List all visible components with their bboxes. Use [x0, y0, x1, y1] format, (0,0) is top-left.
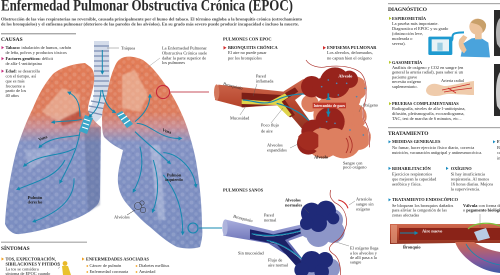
panel: treatment: la supervivencia.: [451, 186, 480, 191]
left lung: [102, 57, 202, 248]
panel: diagnosis: paciente grave: [392, 74, 417, 79]
COPD labels: Alveolo: [314, 154, 328, 160]
panel: lungs with COPD: Los alveolos, deformados,: [327, 50, 373, 56]
panel: diagnosis: Radiografía, niveles de alfa-1-antitripsina,: [392, 106, 465, 112]
panel: treatment: 16 horas diarias. Mejora: [451, 181, 493, 186]
COPD labels: Pared: [256, 74, 267, 78]
icon: coughing person: [58, 261, 71, 275]
COPD labels: Oxígeno: [363, 102, 378, 108]
COPD labels: Poco flujo: [261, 122, 279, 128]
associated diseases: [82, 256, 170, 274]
label: alveolus: Alveolo: [338, 73, 352, 78]
panel: treatment: aeróbica y física.: [392, 181, 422, 186]
panel: causes: [1, 33, 76, 98]
callout: upper lung damage: los pulmones: [162, 60, 185, 65]
healthy labels: Bronquiolo: [233, 214, 253, 223]
intro text: de los bronquiolos) y el enfisema pulmonar (deterioro de las paredes de los alvéolos). En su grado más severo puede producir incapacidad e incluso la muerte.: [1, 22, 299, 27]
panel: healthy lungs: PULMONES SANOS: [223, 188, 264, 192]
panel: lungs with COPD: no captan bien el oxígeno: [327, 55, 372, 60]
panel: treatment: respiratoria. Al menos: [451, 176, 489, 181]
panel: diagnosis: suplementario.: [392, 84, 418, 89]
associated diseases: Cáncer de pulmón: [90, 263, 122, 268]
lung labels: Vena: [162, 127, 173, 135]
COPD labels: de aire: [261, 128, 273, 134]
cause text: con el tiempo, así: [6, 74, 37, 80]
callout: upper lung damage: La Enfermedad Pulmonar: [162, 46, 207, 50]
healthy labels: oxígeno: [356, 206, 370, 212]
panel: treatment: que mejoran la capacidad: [392, 176, 437, 181]
lung tissue texture: [5, 57, 202, 248]
panel: diagnosis: DIAGNÓSTICO: [388, 5, 427, 13]
panel: diagnosis: moderada o: [392, 36, 412, 41]
panel: diagnosis: TAC, test de marcha de 6 minutos, etc...: [392, 116, 462, 122]
panel: lungs with COPD: [214, 36, 378, 170]
panel: lungs with COPD: ENFISEMA PULMONAR: [327, 45, 377, 50]
panel: diagnosis: necesita oxígeno: [392, 79, 421, 84]
panel: treatment: MEDIDAS GENERALES: [392, 139, 441, 144]
panel: lungs with COPD: por los bronquiolos: [228, 55, 262, 60]
lung labels: Pulmón: [28, 195, 43, 200]
cause text: de alfa-1-antitripsina: [6, 61, 42, 66]
healthy labels: Alveolos: [285, 198, 301, 202]
panel: diagnosis: GASOMETRÍA: [392, 60, 423, 65]
panel: treatment: REHABILITACIÓN: [392, 166, 432, 171]
lung labels: izquierdo: [165, 177, 183, 182]
panel: symptoms: SÍNTOMAS: [1, 244, 30, 252]
alveoli detail: [127, 201, 146, 215]
healthy labels: sangre sin: [356, 202, 374, 206]
healthy labels: Flujo de: [268, 258, 282, 262]
COPD labels: Alveolos: [267, 142, 283, 148]
panel: symptoms: [1, 242, 170, 275]
label: gas exchange: Intercambio de gases: [314, 103, 345, 108]
COPD labels: [223, 74, 378, 170]
healthy labels: de allí pasa a la: [350, 255, 377, 260]
panel: treatment: TRATAMIENTO: [388, 131, 428, 137]
callout: upper lung damage: dañar la parte superior de: [162, 56, 206, 60]
panel: diagnosis: severa).: [392, 41, 406, 46]
healthy labels: normal: [264, 218, 277, 222]
icon: spirometer and patient: [428, 19, 490, 57]
lung labels: Pulmón: [167, 172, 182, 178]
bronchiole air path: [243, 94, 323, 126]
vessel with poor oxygen: [346, 136, 352, 153]
intro text: Obstrucción de las vías respiratorias no reversible, causada principalmente por el humo del tabaco. El término engloba a la bronquitis crónica (estrechamiento: [1, 16, 303, 22]
panel: treatment: zonas afectadas: [392, 212, 419, 217]
associated diseases: ENFERMEDADES ASOCIADAS: [86, 256, 149, 261]
panel: treatment: No fumar, hacer ejercicio físico diario, correcta: [392, 145, 474, 151]
panel: symptoms: TOS, EXPECTORACIÓN,: [6, 256, 56, 261]
panel: treatment: OXÍGENO: [451, 166, 472, 171]
healthy labels: Pared: [264, 212, 275, 218]
panel: diagnosis: general la arteria radial), para saber si un: [392, 70, 464, 76]
associated diseases: Diabetes mellitus: [139, 263, 170, 268]
lung labels: derecho: [28, 200, 42, 204]
endoscopic valve: [468, 214, 500, 241]
healthy bronchiole: [222, 219, 317, 275]
cause text: [6, 45, 72, 98]
panel: diagnosis: Análisis de oxígeno y CO2 en sangre (en: [392, 65, 464, 70]
healthy labels: aire normal: [268, 262, 289, 268]
panel: diagnosis: PRUEBAS COMPLEMENTARIAS: [392, 101, 459, 106]
lung labels: Vena: [38, 134, 49, 142]
panel: lungs with COPD: El aire no puede pasar: [228, 50, 267, 55]
trachea: [83, 41, 120, 127]
panel: diagnosis: Diagnostica el EPOC y su grado: [392, 26, 448, 31]
panel: diagnosis: La prueba más importante.: [392, 21, 439, 26]
COPD labels: Sangre con: [343, 160, 363, 166]
bronchus with endoscopic valve: [390, 214, 500, 273]
panel: treatment: para aliviar la congestión de las: [392, 207, 447, 212]
COPD labels: expandidos: [267, 148, 287, 152]
cause text: partir de los: [6, 88, 27, 93]
healthy labels: El oxígeno llega: [350, 246, 379, 250]
associated diseases: Ansiedad: [139, 269, 156, 274]
associated diseases: Enfermedad coronaria: [90, 269, 128, 274]
callout: upper lung damage: Obstructiva Crónica suele: [162, 50, 207, 56]
cause bullets: [2, 46, 4, 73]
panel: treatment: nutrición, vacunación antigripal y antineumocócica.: [392, 150, 482, 156]
emphysema alveoli: [297, 60, 371, 158]
zoom marker: healthy lung to bronchiole: [188, 223, 222, 233]
lung labels: [28, 127, 183, 220]
cause text: que es más: [6, 78, 25, 84]
lung shading: [24, 70, 165, 220]
panel: lungs with COPD: BRONQUITIS CRÓNICA: [228, 45, 278, 50]
cause text: Factores genéticos: déficit: [6, 56, 54, 61]
panel: lungs with COPD: PULMONES CON EPOC: [223, 36, 272, 42]
panel: treatment: Ejercicios respiratorios: [392, 171, 432, 176]
healthy labels: a los alveolos y: [350, 250, 378, 256]
panel: treatment: Si hay insuficiencia: [451, 171, 485, 176]
lower alveoli: [298, 128, 347, 152]
label: trachea: [107, 46, 135, 50]
bronchi blocks: [79, 111, 133, 134]
panel: causes: CAUSAS: [1, 37, 23, 43]
panel: diagnosis: ESPIROMETRÍA: [392, 16, 427, 21]
panel: symptoms: SIBILACIONES Y PITIDOS: [6, 261, 60, 266]
panel: symptoms: La tos se considera: [6, 266, 39, 271]
panel: healthy lungs: [222, 188, 379, 275]
COPD labels: inflamada: [256, 78, 273, 84]
bronchus with endoscopic valve: Bronquio: [403, 245, 421, 250]
bronchus with endoscopic valve: Aire nuevo: [422, 228, 442, 234]
zoom marker: damaged lung to bronchiole: [156, 85, 209, 99]
intro text: [1, 16, 303, 27]
panel: diagnosis: difusión, pletismografía, ecocardiograma,: [392, 111, 464, 117]
right lung: [5, 63, 101, 234]
healthy alveoli: [294, 190, 348, 275]
callout: upper lung damage: [148, 46, 207, 67]
healthy labels: normales: [285, 202, 302, 208]
healthy labels: sangre: [350, 260, 361, 264]
lungs illustration: [5, 41, 202, 248]
COPD labels: poco oxígeno: [343, 164, 367, 170]
airflow arrows: [17, 50, 196, 234]
cause text: 40 años: [6, 93, 19, 98]
healthy labels: Arteriola: [356, 196, 372, 202]
inflamed bronchiole: [214, 79, 323, 128]
x-ray images: [494, 10, 500, 116]
COPD labels: Mucosidad: [230, 116, 250, 121]
panel: treatment: [388, 127, 500, 273]
cause text: de leña, polvos y productos tóxicos: [6, 50, 67, 56]
label: trachea: Tráquea: [121, 46, 135, 50]
panel: diagnosis: [388, 3, 500, 122]
healthy labels: [233, 196, 379, 268]
healthy labels: Sin mucosidad: [238, 250, 265, 256]
cause text: frecuente a: [6, 84, 25, 88]
cause text: Tabaco: inhalación de humos, carbón: [6, 45, 72, 51]
lung labels: Alvéolos: [114, 214, 130, 220]
panel: diagnosis: (obstrucción leve,: [392, 31, 423, 37]
cause text: Edad: se desarrolla: [6, 68, 40, 74]
icon: arm with radial artery: Arteria radial: [441, 78, 465, 83]
panel: treatment: TRATAMIENTO ENDOSCÓPICO: [392, 197, 459, 202]
COPD labels: Bronquiolo: [223, 81, 243, 91]
panel: treatment: Se bloquean los bronquios dañados: [392, 203, 454, 208]
